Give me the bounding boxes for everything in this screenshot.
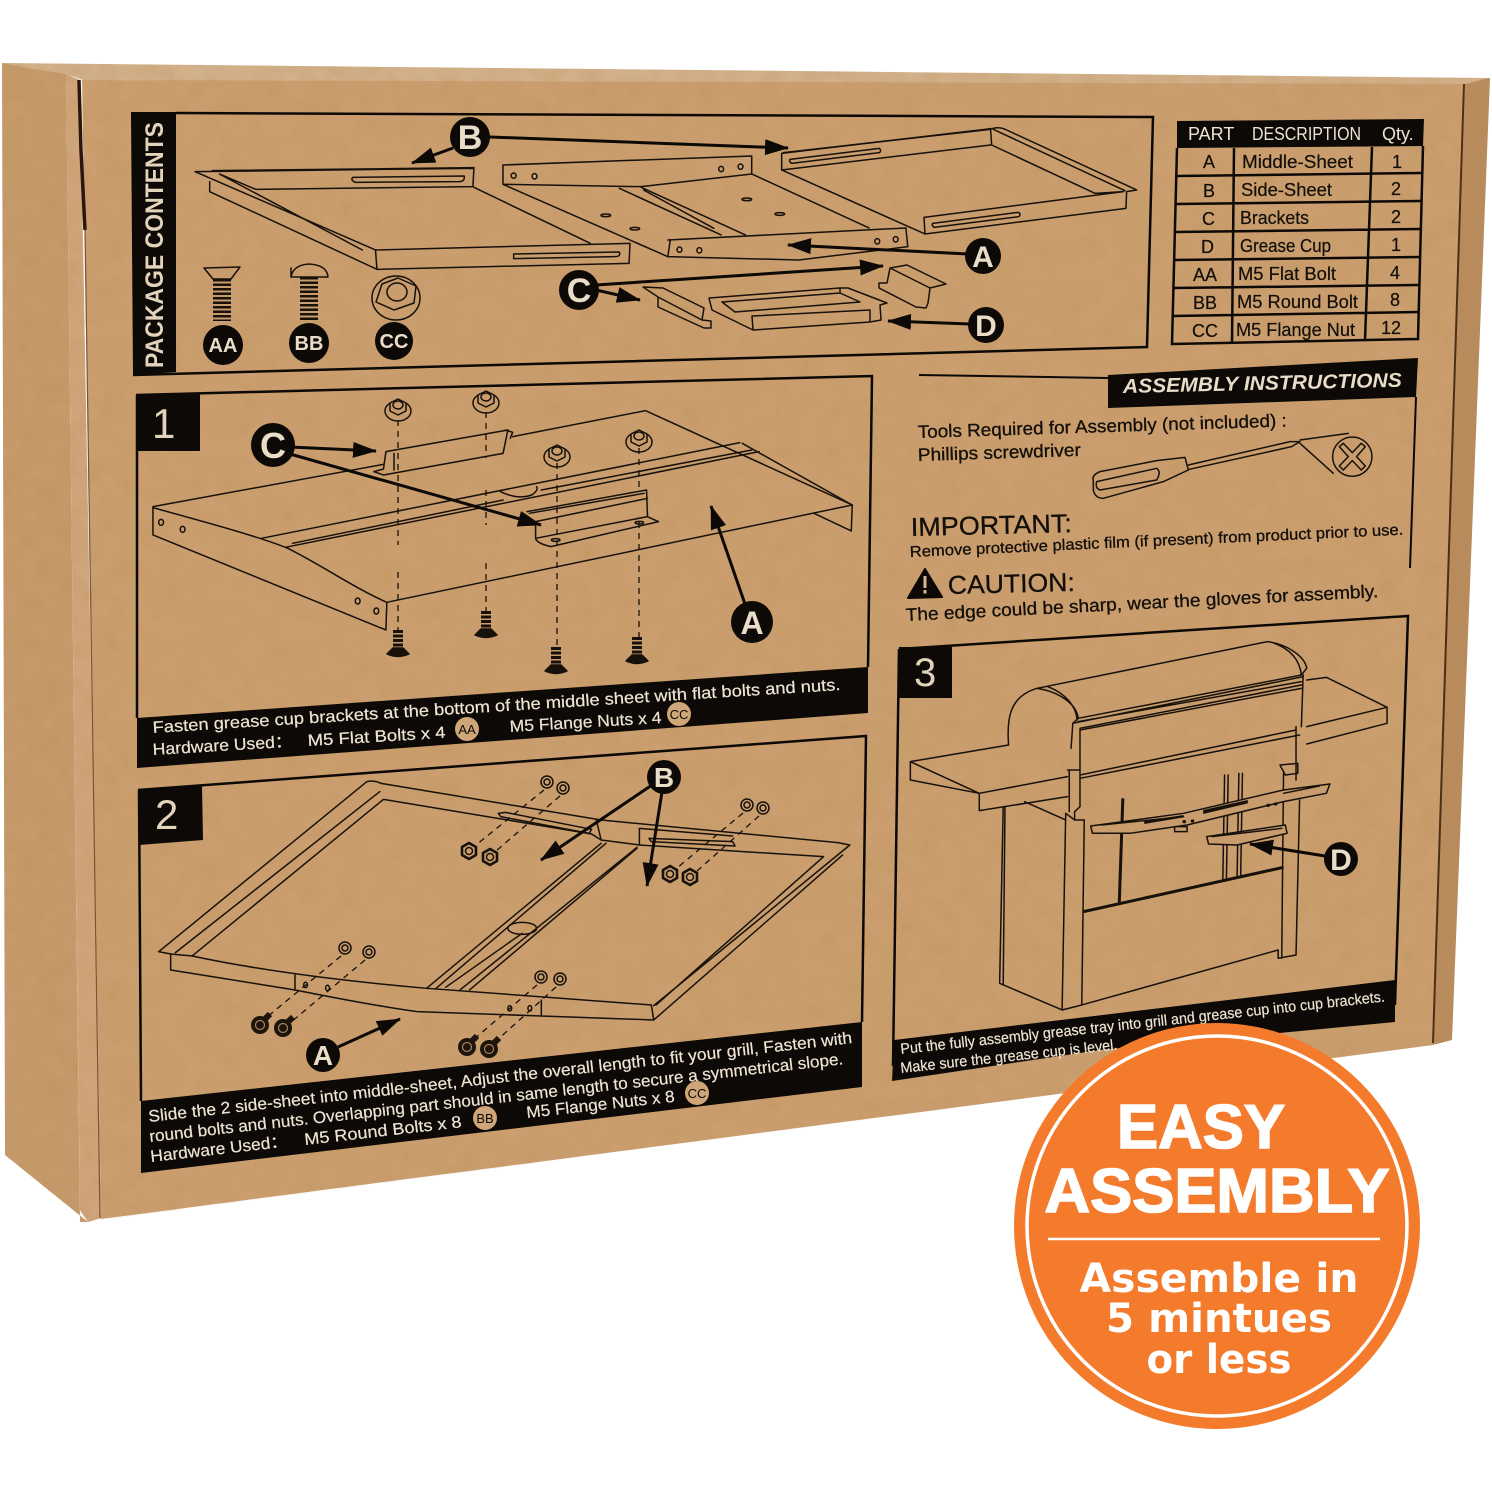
callout D: D (1330, 844, 1352, 877)
parts table: M5 Flat Bolt (1238, 264, 1336, 284)
callouts: C (260, 425, 286, 466)
caption: CC (688, 1086, 706, 1101)
tools required text (917, 410, 1287, 465)
parts table: M5 Round Bolt (1237, 292, 1358, 312)
parts table: A (1203, 152, 1215, 172)
callouts (306, 760, 681, 1072)
parts table: 2 (1391, 207, 1401, 227)
middle sheet (503, 156, 908, 260)
icon: screwdriver (1093, 433, 1372, 498)
parts table: Brackets (1240, 208, 1309, 228)
parts table: 1 (1391, 235, 1401, 255)
callout circles: B (458, 119, 482, 157)
parts table: CC (1192, 321, 1218, 341)
caption (137, 667, 868, 768)
callouts: B (654, 762, 674, 793)
caption (141, 1022, 862, 1173)
parts table: AA (1193, 265, 1217, 285)
middle sheet drawing (153, 411, 852, 630)
caution notice (905, 567, 1379, 625)
tools required text: Phillips screwdriver (917, 440, 1081, 465)
parts table: BB (1193, 293, 1217, 313)
parts table: 4 (1390, 263, 1400, 283)
badge subtext: 5 mintues (1106, 1296, 1332, 1342)
badge heading: ASSEMBLY (1044, 1157, 1390, 1226)
heading: package contents: PACKAGE CONTENTS (141, 122, 169, 368)
important notice: IMPORTANT: (910, 508, 1072, 542)
hardware (251, 776, 769, 1058)
caption: M5 Flange Nuts x 8 (525, 1088, 676, 1122)
side sheet left (195, 168, 630, 269)
caption: M5 Flat Bolts x 4 (307, 724, 446, 750)
step number 2: 2 (155, 791, 178, 838)
parts table: 8 (1390, 290, 1400, 310)
caption: BB (476, 1111, 494, 1126)
parts table: Grease Cup (1240, 236, 1331, 256)
sheets drawing (159, 781, 850, 1020)
callouts (251, 423, 773, 643)
caption: M5 Flange Nuts x 4 (509, 709, 662, 736)
step number 1 (136, 394, 200, 451)
caption: Hardware Used： (152, 733, 293, 759)
callout D (1250, 842, 1358, 877)
caption: Put the fully assembly grease tray into grill and grease cup into cup brackets. (900, 988, 1386, 1058)
callout circles: A (972, 241, 994, 274)
caption: Slide the 2 side-sheet into middle-sheet, Adjust the overall length to fit your grill, Fasten with (147, 1029, 853, 1126)
parts table: Qty. (1382, 124, 1414, 144)
caption (892, 980, 1395, 1081)
heading: package contents (131, 112, 176, 375)
important notice (909, 508, 1404, 561)
cardboard box (0, 60, 1492, 1230)
grill drawing (910, 642, 1387, 1010)
parts table: PART (1188, 124, 1234, 144)
step number 3: 3 (914, 651, 936, 695)
callouts: A (313, 1040, 333, 1071)
step number 3 (899, 647, 952, 698)
caption: Fasten grease cup brackets at the bottom of the middle sheet with flat bolts and nuts. (152, 676, 841, 737)
tools required text: Tools Required for Assembly (not included) : (917, 410, 1287, 442)
badge: easy assembly (1014, 1023, 1420, 1429)
parts table: C (1202, 209, 1215, 229)
callout circles: D (975, 310, 997, 343)
callout circles (203, 117, 1004, 365)
parts table: 1 (1392, 152, 1402, 172)
parts table: 2 (1391, 179, 1401, 199)
callout circles: CC (380, 331, 408, 353)
parts table: Side-Sheet (1241, 180, 1332, 200)
callout circles: AA (209, 335, 237, 357)
badge subtext: or less (1146, 1337, 1292, 1383)
badge heading (1044, 1093, 1390, 1226)
brackets (374, 430, 659, 547)
heading: assembly instructions: ASSEMBLY INSTRUCTIONS (1122, 370, 1403, 398)
panel: step 2 (138, 736, 866, 1173)
caution notice: The edge could be sharp, wear the gloves for assembly. (905, 581, 1379, 625)
caption: Make sure the grease cup is level. (900, 1037, 1118, 1077)
parts table: DESCRIPTION (1252, 124, 1361, 144)
panel: package contents (131, 112, 1153, 375)
badge subtext: Assemble in (1080, 1256, 1358, 1302)
panel: assembly instructions (905, 358, 1418, 625)
caption: AA (458, 722, 476, 737)
panel: step 1 (136, 376, 872, 768)
callout circles: C (567, 272, 591, 310)
caption: CC (670, 707, 688, 722)
caution notice: CAUTION: (947, 567, 1075, 600)
badge heading: EASY (1117, 1093, 1285, 1162)
side sheet right (782, 128, 1137, 234)
parts table (1172, 119, 1424, 344)
callout circles: BB (295, 333, 323, 355)
badge subtext (1080, 1256, 1358, 1383)
heading: assembly instructions (1108, 358, 1418, 408)
parts table: D (1201, 237, 1214, 257)
caption: Hardware Used： (149, 1132, 289, 1166)
caption: round bolts and nuts. Overlapping part should in same length to secure a symmetrical slope. (148, 1050, 844, 1146)
panel: step 3 (892, 616, 1408, 1081)
callouts: A (740, 605, 764, 641)
important notice: Remove protective plastic film (if present) from product prior to use. (909, 522, 1404, 561)
step number 2 (138, 786, 203, 845)
hardware icons (204, 264, 420, 321)
parts table: M5 Flange Nut (1236, 320, 1355, 340)
caption: M5 Round Bolts x 8 (303, 1113, 462, 1149)
parts table: Middle-Sheet (1242, 152, 1353, 172)
step number 1: 1 (152, 400, 175, 447)
parts table: B (1203, 181, 1215, 201)
icon: warning triangle (908, 569, 942, 598)
parts table: 12 (1381, 318, 1401, 338)
hardware (385, 391, 652, 674)
brackets and grease cup (643, 265, 946, 330)
